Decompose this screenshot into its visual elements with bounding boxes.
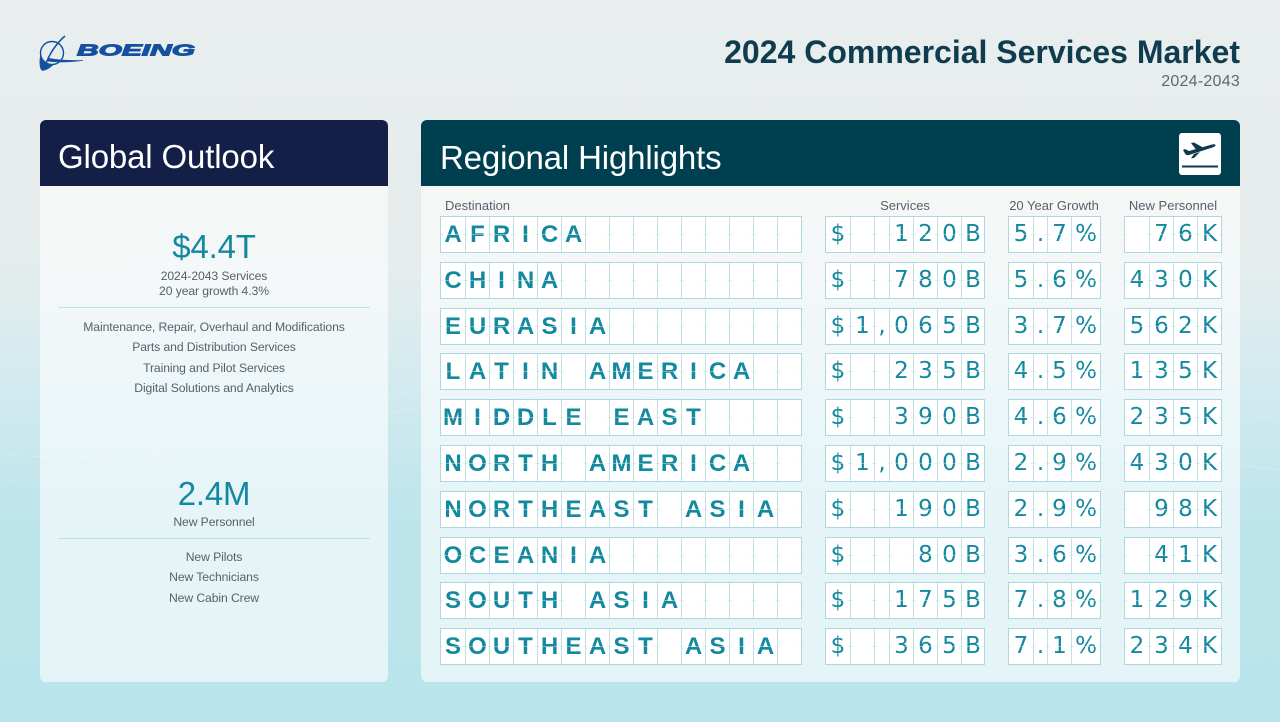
board row: Oceania (440, 537, 1222, 574)
board row: Oceania: N (541, 542, 558, 569)
list: personnel categories: New Cabin Crew (169, 591, 259, 605)
board row: Southeast Asia: I (738, 633, 745, 660)
board row: North America: 9 (1052, 450, 1067, 476)
logo wordmark: BOEING (77, 42, 195, 60)
board row: Latin America: 3 (918, 358, 933, 384)
board row: China: N (517, 267, 534, 294)
board row: China: 4 (1130, 267, 1144, 293)
board row: Africa: 7 (1154, 221, 1169, 247)
icon: departing plane (1179, 133, 1221, 175)
board row: Latin America: 5 (1052, 358, 1067, 384)
board row: South Asia: 5 (942, 587, 957, 613)
board row: Northeast Asia: R (493, 496, 510, 523)
board row: Middle East: 5 (1178, 404, 1193, 430)
board row: North America: I (690, 450, 697, 477)
column header: Services: Services (880, 198, 930, 213)
board row: Africa (440, 216, 1222, 253)
board row: Latin America: N (541, 358, 558, 385)
board row: Middle East: 4 (1014, 404, 1028, 430)
board row: North America: B (965, 450, 981, 476)
board row: Africa: K (1202, 221, 1217, 247)
board row: China: C (444, 267, 462, 294)
board row: Eurasia: I (570, 313, 577, 340)
board row: Middle East: $ (831, 404, 845, 430)
board row: Northeast Asia: I (738, 496, 745, 523)
board row: South Asia: % (1075, 587, 1097, 613)
board row: Middle East: 6 (1052, 404, 1067, 430)
board row: Southeast Asia: 2 (1130, 633, 1144, 659)
board row: Middle East: M (443, 404, 463, 431)
board row: Africa: $ (831, 221, 845, 247)
board row: Southeast Asia: U (493, 633, 510, 660)
board row: Eurasia: 3 (1014, 313, 1028, 339)
board row: Africa: A (444, 221, 462, 248)
board row: Northeast Asia: S (709, 496, 726, 523)
board row: Latin America: 2 (894, 358, 909, 384)
board row: Northeast Asia: E (565, 496, 582, 523)
board row: Oceania: I (570, 542, 577, 569)
board row: Middle East: I (474, 404, 481, 431)
board row: Latin America: I (690, 358, 697, 385)
board row: Latin America: T (494, 358, 509, 385)
board row: Middle East: B (965, 404, 981, 430)
board row: South Asia (440, 582, 1222, 619)
board row: Latin America: 5 (1178, 358, 1193, 384)
subtitle: date range: 2024-2043 (1161, 73, 1240, 90)
board row: Oceania: B (965, 542, 981, 568)
board row: Northeast Asia: 9 (1154, 496, 1169, 522)
board row: China: 3 (1154, 267, 1169, 293)
board row: North America: M (612, 450, 632, 477)
board row: Middle East: L (542, 404, 557, 431)
board row: South Asia: . (1037, 587, 1044, 613)
stat: services value: $4.4T (172, 228, 256, 265)
board row: South Asia: B (965, 587, 981, 613)
board row: Latin America: I (522, 358, 529, 385)
board row: Northeast Asia: 0 (942, 496, 957, 522)
board row: Middle East: . (1037, 404, 1044, 430)
board row: China: $ (831, 267, 845, 293)
board row: Oceania: E (493, 542, 510, 569)
board row: Northeast Asia: A (685, 496, 702, 523)
board row: Southeast Asia: . (1037, 633, 1044, 659)
board row: North America: C (709, 450, 726, 477)
board row: North America: 3 (1154, 450, 1169, 476)
board row: Eurasia: E (445, 313, 461, 340)
board row: Latin America (440, 353, 1222, 390)
board row: North America: E (637, 450, 654, 477)
board row: Latin America: 1 (1130, 358, 1144, 384)
column header: 20 Year Growth: 20 Year Growth (1009, 198, 1099, 213)
board row: Oceania: 8 (918, 542, 933, 568)
board row: Middle East: A (637, 404, 654, 431)
board row: Oceania: O (444, 542, 462, 569)
board row: Southeast Asia: H (541, 633, 558, 660)
board row: Eurasia: . (1037, 313, 1044, 339)
board row: Middle East (440, 399, 1222, 436)
board row: Oceania: $ (831, 542, 845, 568)
board row: Africa: 2 (918, 221, 933, 247)
board row: North America: , (878, 450, 886, 476)
board row: Latin America: C (709, 358, 726, 385)
board row: Middle East: K (1202, 404, 1217, 430)
board row: North America: 2 (1014, 450, 1028, 476)
board row: Africa: B (965, 221, 981, 247)
stat caption: services (159, 269, 269, 298)
board row: China: 0 (942, 267, 957, 293)
board row: Eurasia: B (965, 313, 981, 339)
board row: China: 8 (918, 267, 933, 293)
board row: Middle East: 2 (1130, 404, 1144, 430)
title: 2024 Commercial Services Market (724, 34, 1240, 70)
board row: Northeast Asia: A (757, 496, 774, 523)
board row: North America: . (1037, 450, 1044, 476)
board row: China: I (498, 267, 505, 294)
board row: Southeast Asia: 3 (1154, 633, 1169, 659)
board row: Eurasia: U (469, 313, 486, 340)
board row: Northeast Asia: 2 (1014, 496, 1028, 522)
board row: North America: $ (831, 450, 845, 476)
board row: Africa: F (470, 221, 485, 248)
board row: North America: 0 (918, 450, 933, 476)
board row: Eurasia: 2 (1178, 313, 1193, 339)
board row: North America: A (733, 450, 750, 477)
board row: Northeast Asia: K (1202, 496, 1217, 522)
board row: Oceania: % (1075, 542, 1097, 568)
column header: Destination: Destination (445, 198, 510, 213)
board row: North America: H (541, 450, 558, 477)
board row: Southeast Asia: 7 (1014, 633, 1028, 659)
board row: Eurasia: A (589, 313, 606, 340)
list: service categories (83, 320, 345, 395)
panel heading: Global Outlook (40, 120, 388, 186)
board row: Eurasia (440, 308, 1222, 345)
board row: Middle East: D (493, 404, 510, 431)
board row: Middle East: S (661, 404, 678, 431)
board row: North America: 1 (855, 450, 870, 476)
board row: Eurasia: 6 (1154, 313, 1169, 339)
board row: Southeast Asia: 6 (918, 633, 933, 659)
board row: Northeast Asia (440, 491, 1222, 528)
board row: Southeast Asia: S (709, 633, 726, 660)
board row: Southeast Asia: E (565, 633, 582, 660)
board row: North America: R (661, 450, 678, 477)
board row: South Asia: K (1202, 587, 1217, 613)
board row: South Asia: A (661, 587, 678, 614)
board row: Latin America: R (661, 358, 678, 385)
board row: Southeast Asia: 3 (894, 633, 909, 659)
board row: China: H (469, 267, 486, 294)
board row: Oceania: 6 (1052, 542, 1067, 568)
panel heading: Global Outlook: Global Outlook (58, 138, 274, 175)
board row: Africa: 1 (894, 221, 909, 247)
board row: South Asia: 7 (1014, 587, 1028, 613)
board row: South Asia: A (589, 587, 606, 614)
board row: Oceania: 4 (1154, 542, 1169, 568)
stat caption: services: 2024-2043 Services (161, 269, 267, 283)
board row: South Asia: 9 (1178, 587, 1193, 613)
board row: Latin America: M (612, 358, 632, 385)
board row: Middle East: 3 (894, 404, 909, 430)
board row: Latin America: 3 (1154, 358, 1169, 384)
board row: Southeast Asia: % (1075, 633, 1097, 659)
board row: North America: A (589, 450, 606, 477)
board row: Oceania: C (469, 542, 486, 569)
board row: Oceania: A (589, 542, 606, 569)
board row: Northeast Asia: . (1037, 496, 1044, 522)
board row: Eurasia: 1 (855, 313, 870, 339)
board row: Africa: I (522, 221, 529, 248)
board row: Southeast Asia: S (445, 633, 461, 660)
board row: Latin America: . (1037, 358, 1044, 384)
icon: Boeing emblem (40, 36, 83, 71)
board row: Eurasia: 5 (1130, 313, 1144, 339)
panel heading: Regional Highlights: Regional Highlights (440, 139, 722, 176)
board row: China: 0 (1178, 267, 1193, 293)
board row: South Asia: 2 (1154, 587, 1169, 613)
board row: Oceania: K (1202, 542, 1217, 568)
list: personnel categories: New Technicians (169, 570, 259, 584)
board row: North America: T (518, 450, 533, 477)
board row: Oceania: 1 (1178, 542, 1193, 568)
board row: Northeast Asia: S (613, 496, 630, 523)
board row: Eurasia: 5 (942, 313, 957, 339)
board row: Eurasia: 7 (1052, 313, 1067, 339)
board row: Latin America: E (637, 358, 654, 385)
board row: Eurasia: $ (831, 313, 845, 339)
board row: Southeast Asia: K (1202, 633, 1217, 659)
board row: Eurasia: S (541, 313, 558, 340)
board row: Oceania: . (1037, 542, 1044, 568)
board row: Africa: R (493, 221, 510, 248)
board row: Africa: % (1075, 221, 1097, 247)
board row: Latin America: A (469, 358, 486, 385)
board row: Northeast Asia: 9 (918, 496, 933, 522)
board row: Africa: C (541, 221, 558, 248)
board row: China: 7 (894, 267, 909, 293)
board row: Northeast Asia: % (1075, 496, 1097, 522)
board row: Southeast Asia: S (613, 633, 630, 660)
board row: South Asia: S (445, 587, 461, 614)
board row: Middle East: % (1075, 404, 1097, 430)
board row: China: A (541, 267, 558, 294)
column header: New Personnel: New Personnel (1129, 198, 1217, 213)
list: service categories: Maintenance, Repair, Overhaul and Modifications (83, 320, 345, 334)
board row: South Asia: U (493, 587, 510, 614)
board row: South Asia: $ (831, 587, 845, 613)
board row: South Asia: 1 (1130, 587, 1144, 613)
board row: China: 6 (1052, 267, 1067, 293)
board row: Northeast Asia: 1 (894, 496, 909, 522)
list: service categories: Training and Pilot Services (143, 361, 285, 375)
panel heading: Regional Highlights (421, 120, 1240, 186)
board row: Southeast Asia (440, 628, 1222, 665)
board row: Northeast Asia: $ (831, 496, 845, 522)
board row: China: % (1075, 267, 1097, 293)
board row: Eurasia: R (493, 313, 510, 340)
board row: South Asia: T (518, 587, 533, 614)
board row: Northeast Asia: 9 (1052, 496, 1067, 522)
stat caption: services: 20 year growth 4.3% (159, 284, 269, 298)
board row: Southeast Asia: A (589, 633, 606, 660)
board row: Middle East: 0 (942, 404, 957, 430)
board row: Middle East: T (686, 404, 701, 431)
board row: Northeast Asia: H (541, 496, 558, 523)
board row: Southeast Asia: B (965, 633, 981, 659)
board row: Northeast Asia: N (444, 496, 462, 523)
board row: North America: K (1202, 450, 1217, 476)
board row: China: B (965, 267, 981, 293)
board row: North America: N (444, 450, 462, 477)
board row: Middle East: E (565, 404, 582, 431)
list: service categories: Digital Solutions and Analytics (134, 381, 294, 395)
board row: Oceania: A (517, 542, 534, 569)
board row: Northeast Asia: B (965, 496, 981, 522)
board row: South Asia: S (613, 587, 630, 614)
board row: North America: 0 (1178, 450, 1193, 476)
board row: South Asia: 8 (1052, 587, 1067, 613)
board row: Latin America: 5 (942, 358, 957, 384)
board row: Latin America: A (589, 358, 606, 385)
board row: Northeast Asia: A (589, 496, 606, 523)
board row: Latin America: $ (831, 358, 845, 384)
board row: Eurasia: , (878, 313, 886, 339)
board row: North America: R (493, 450, 510, 477)
board row: South Asia: H (541, 587, 558, 614)
board row: Latin America: % (1075, 358, 1097, 384)
stat: personnel value: 2.4M (178, 475, 250, 512)
stat caption: personnel: New Personnel (173, 515, 255, 529)
board row: Southeast Asia: T (638, 633, 653, 660)
panel: Global Outlook (40, 120, 388, 682)
board row: Eurasia: % (1075, 313, 1097, 339)
board row: China: K (1202, 267, 1217, 293)
board row: Eurasia: 0 (894, 313, 909, 339)
panel: Regional Highlights (421, 120, 1240, 682)
board row: North America: O (468, 450, 487, 477)
logo: Boeing (40, 36, 196, 71)
board row: Southeast Asia: A (685, 633, 702, 660)
board row: Latin America: A (733, 358, 750, 385)
board row: North America: 0 (894, 450, 909, 476)
board row: Africa: A (565, 221, 582, 248)
board row: North America: % (1075, 450, 1097, 476)
board row: Northeast Asia: T (638, 496, 653, 523)
list: personnel categories: New Pilots (186, 550, 242, 564)
board row: Northeast Asia: O (468, 496, 487, 523)
board row: Africa: 6 (1178, 221, 1193, 247)
board row: Eurasia: 6 (918, 313, 933, 339)
board row: Middle East: 9 (918, 404, 933, 430)
board row: Eurasia: K (1202, 313, 1217, 339)
board row: North America: 0 (942, 450, 957, 476)
board row: Africa: 7 (1052, 221, 1067, 247)
board row: Southeast Asia: 1 (1052, 633, 1067, 659)
board row: Northeast Asia: 8 (1178, 496, 1193, 522)
board row: Southeast Asia: O (468, 633, 487, 660)
board row: Middle East: D (517, 404, 534, 431)
board row: Oceania: 3 (1014, 542, 1028, 568)
list: personnel categories (169, 550, 259, 605)
board row: Southeast Asia: 5 (942, 633, 957, 659)
board row: South Asia: 1 (894, 587, 909, 613)
board row: Oceania: 0 (942, 542, 957, 568)
board row: Northeast Asia: T (518, 496, 533, 523)
board row: South Asia: 7 (918, 587, 933, 613)
board row: Africa: . (1037, 221, 1044, 247)
board row: Latin America: B (965, 358, 981, 384)
board row: Middle East: E (613, 404, 630, 431)
board row: Africa: 0 (942, 221, 957, 247)
board row: Southeast Asia: 4 (1178, 633, 1193, 659)
board row: China (440, 262, 1222, 299)
board row: Eurasia: A (517, 313, 534, 340)
list: service categories: Parts and Distribution Services (132, 340, 296, 354)
board row: Southeast Asia: $ (831, 633, 845, 659)
board row: Latin America: K (1202, 358, 1217, 384)
board row: China: 5 (1014, 267, 1028, 293)
board row: South Asia: I (642, 587, 649, 614)
board row: Latin America: L (446, 358, 460, 385)
board row: Africa: 5 (1014, 221, 1028, 247)
board row: South Asia: O (468, 587, 487, 614)
board row: North America (440, 445, 1222, 482)
board row: China: . (1037, 267, 1044, 293)
board row: North America: 4 (1130, 450, 1144, 476)
board row: Latin America: 4 (1014, 358, 1028, 384)
board row: Southeast Asia: T (518, 633, 533, 660)
board row: Middle East: 3 (1154, 404, 1169, 430)
board row: Southeast Asia: A (757, 633, 774, 660)
